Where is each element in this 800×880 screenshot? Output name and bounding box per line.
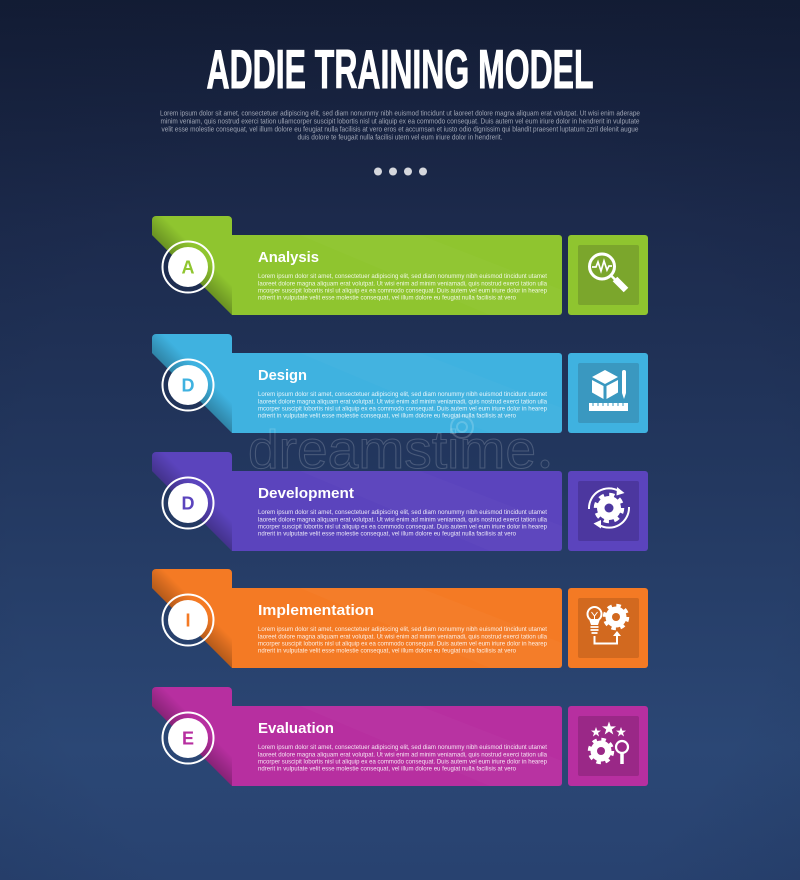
- badge: A: [162, 242, 214, 292]
- body text: Analysis: Lorem ipsum dolor sit amet, consectetuer adipiscing elit, sed diam nonummy nibh euismod tincidunt utamet: [258, 273, 547, 280]
- icon box: stars, gear and magnifier: [568, 706, 648, 786]
- body text: Implementation: ndrerit in vulputate velit esse molestie consequat, vel illum dolore eu feugiat nulla facilisis at vero: [258, 648, 516, 654]
- body text: Implementation: mcorper suscipit lobortis nisl ut aliquip ex ea commodo consequat. Duis autem vel eum iriure dolor in hearep: [258, 640, 547, 648]
- heading: Implementation: Implementation: [258, 602, 374, 619]
- pagination dots: [374, 168, 427, 176]
- intro paragraph: [160, 110, 640, 142]
- badge: E: E: [182, 728, 194, 748]
- panel: Analysis: [152, 216, 648, 315]
- body text: Analysis: ndrerit in vulputate velit esse molestie consequat, vel illum dolore eu feugiat nulla facilisis at vero: [258, 294, 516, 302]
- heading: Analysis: Analysis: [258, 249, 319, 266]
- intro paragraph: duis dolore te feugait nulla facilisi utem vel eum iriure dolor in hendrerit.: [298, 134, 503, 142]
- watermark: dreamstime: [248, 420, 536, 480]
- body text: Development: [258, 509, 547, 538]
- body text: Evaluation: [258, 744, 547, 772]
- badge: I: [162, 594, 214, 646]
- body text: Analysis: laoreet dolore magna aliquam erat volutpat. Ut wisi enim ad minim veniamadi, quis nostrud exerci tation ulla: [258, 280, 547, 288]
- flap: Analysis: [152, 216, 232, 315]
- body text: Design: mcorper suscipit lobortis nisl ut aliquip ex ea commodo consequat. Duis autem vel eum iriure dolor in hearep: [258, 406, 547, 412]
- bar: Evaluation: [232, 706, 562, 786]
- bar: Development: [232, 471, 562, 551]
- intro paragraph: minim veniam, quis nostrud exerci tation ullamcorper suscipit lobortis nisl ut aliquip ex ea commodo consequat. Duis autem vel eum iriure dolor in hendrerit in vulputate: [160, 118, 640, 126]
- icon box: cube, pencil and ruler: [568, 353, 648, 433]
- body text: Implementation: Lorem ipsum dolor sit amet, consectetuer adipiscing elit, sed diam nonummy nibh euismod tincidunt utamet: [258, 626, 547, 633]
- body text: Evaluation: Lorem ipsum dolor sit amet, consectetuer adipiscing elit, sed diam nonummy nibh euismod tincidunt utamet: [258, 744, 547, 751]
- heading: Evaluation: Evaluation: [258, 720, 334, 737]
- panel: Implementation: [152, 569, 648, 668]
- flap: Implementation: [152, 569, 232, 668]
- intro paragraph: Lorem ipsum dolor sit amet, consectetuer adipiscing elit, sed diam nonummy nibh euismod tincidunt ut laoreet dolore magna aliquam erat volutpat. Ut wisi enim aderape: [160, 110, 640, 118]
- badge: E: [162, 712, 214, 764]
- body text: Implementation: [258, 626, 547, 654]
- panel: Development: [152, 452, 648, 551]
- badge: I: I: [185, 610, 191, 630]
- body text: Design: laoreet dolore magna aliquam erat volutpat. Ut wisi enim ad minim veniamadi, quis nostrud exerci tation ulla: [258, 398, 547, 406]
- badge: D: [162, 360, 214, 410]
- bar: Analysis: [232, 235, 562, 315]
- badge: D: D: [182, 494, 194, 514]
- badge: D: [162, 478, 214, 528]
- panel: Evaluation: [152, 687, 648, 786]
- body text: Analysis: mcorper suscipit lobortis nisl ut aliquip ex ea commodo consequat. Duis autem vel eum iriure dolor in hearep: [258, 288, 547, 294]
- badge: D: D: [182, 376, 194, 396]
- intro paragraph: velit esse molestie consequat, vel illum dolore eu feugiat nulla facilisis at vero eros et accumsan et iusto odio dignissim qui blandit praesent luptatum zzril delenit augue: [162, 126, 639, 134]
- body text: Design: ndrerit in vulputate velit esse molestie consequat, vel illum dolore eu feugiat nulla facilisis at vero: [258, 412, 516, 420]
- badge: A: A: [182, 258, 194, 278]
- body text: Evaluation: laoreet dolore magna aliquam erat volutpat. Ut wisi enim ad minim veniamadi, quis nostrud exerci tation ulla: [258, 752, 547, 758]
- panel: Design: [152, 334, 648, 433]
- flap: Evaluation: [152, 687, 232, 786]
- body text: Evaluation: ndrerit in vulputate velit esse molestie consequat, vel illum dolore eu feugiat nulla facilisis at vero: [258, 766, 516, 772]
- heading: Design: Design: [258, 367, 307, 384]
- flap: Development: [152, 452, 232, 551]
- bar: Design: [232, 353, 562, 433]
- icon box: gear with cycle arrows: [568, 471, 648, 551]
- body text: Analysis: [258, 273, 547, 302]
- icon box: magnifier with pulse: [568, 235, 648, 315]
- body text: Development: ndrerit in vulputate velit esse molestie consequat, vel illum dolore eu feugiat nulla facilisis at vero: [258, 530, 516, 538]
- body text: Implementation: laoreet dolore magna aliquam erat volutpat. Ut wisi enim ad minim veniamadi, quis nostrud exerci tation ulla: [258, 634, 547, 640]
- flap: Design: [152, 334, 232, 433]
- body text: Development: Lorem ipsum dolor sit amet, consectetuer adipiscing elit, sed diam nonummy nibh euismod tincidunt utamet: [258, 509, 547, 516]
- body text: Evaluation: mcorper suscipit lobortis nisl ut aliquip ex ea commodo consequat. Duis autem vel eum iriure dolor in hearep: [258, 758, 547, 766]
- body text: Design: [258, 391, 547, 420]
- body text: Development: mcorper suscipit lobortis nisl ut aliquip ex ea commodo consequat. Duis autem vel eum iriure dolor in hearep: [258, 524, 547, 530]
- bar: Implementation: [232, 588, 562, 668]
- icon box: light bulb, gear and arrow: [568, 588, 648, 668]
- body text: Development: laoreet dolore magna aliquam erat volutpat. Ut wisi enim ad minim veniamadi, quis nostrud exerci tation ulla: [258, 516, 547, 524]
- body text: Design: Lorem ipsum dolor sit amet, consectetuer adipiscing elit, sed diam nonummy nibh euismod tincidunt utamet: [258, 391, 547, 398]
- heading: Development: Development: [258, 485, 354, 502]
